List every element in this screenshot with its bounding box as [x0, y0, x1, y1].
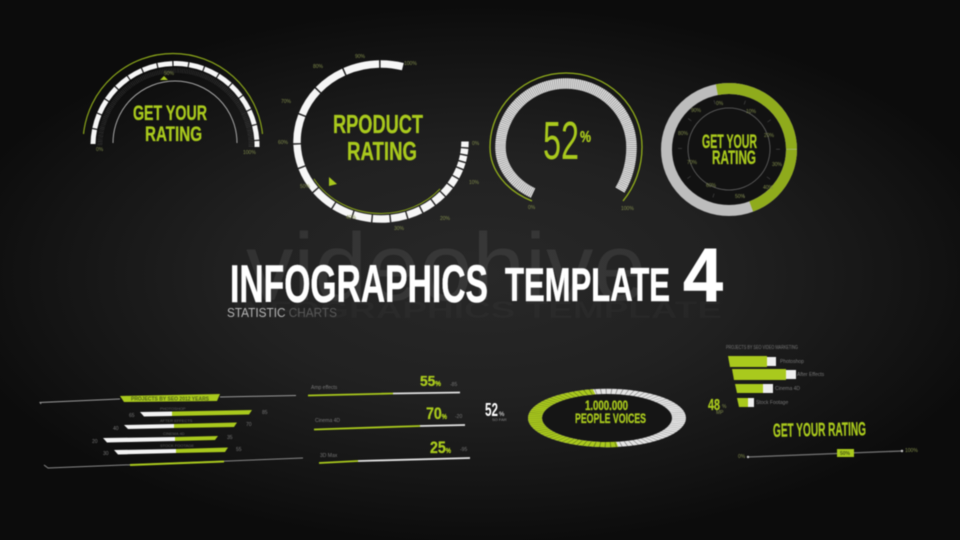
bar: photoshop: PHOTOSHOP: [160, 406, 186, 411]
bar: stock footage: 55: [236, 447, 242, 453]
scale labels: 0%: [528, 205, 536, 211]
heading: get your rating: GET YOUR RATING: [773, 419, 866, 442]
olive progress: [666, 88, 792, 210]
gauge heading: RPODUCT: [333, 109, 423, 139]
stat: 48 percent: %: [722, 404, 727, 410]
bar: after effects: After Effects: [797, 372, 825, 378]
panel: software bars: [308, 373, 470, 463]
scale labels: 0%: [472, 141, 480, 147]
bar: cinema 4d: 20: [92, 439, 98, 445]
title: 4: [683, 233, 723, 318]
bar: photoshop: [129, 406, 268, 419]
scale labels: 20%: [764, 133, 775, 139]
scale labels: 80%: [678, 131, 689, 137]
slider: 100%: [905, 448, 918, 454]
panel: projects slanted bars: [40, 394, 303, 468]
hatched band: [500, 84, 632, 193]
value: 52: [543, 111, 579, 171]
scale labels: [528, 205, 634, 212]
row: 3d max: -95: [460, 447, 467, 453]
gauge: rating dial: [666, 88, 792, 210]
gauge heading: RATING: [347, 136, 417, 166]
scale labels: 40%: [763, 185, 774, 191]
scale labels: 100%: [243, 150, 256, 156]
segmented white band: [297, 64, 465, 219]
gauge: 52 percent: [490, 73, 642, 212]
scale labels: 90%: [691, 108, 702, 114]
scale labels: 40%: [346, 215, 357, 221]
ellipse chart: people voices: [535, 391, 679, 445]
bar: stock footage: Stock Footage: [756, 400, 788, 406]
grey ring: [666, 88, 792, 210]
scale labels: 70%: [281, 99, 292, 105]
bar: stock footage: 30: [103, 451, 109, 457]
stat: 52 percent: %: [499, 412, 505, 418]
gauge heading: [333, 109, 423, 166]
bar: stock footage: STOCK FOOTAGE: [160, 443, 194, 448]
header ribbon: [120, 394, 220, 402]
bar: photoshop: 85: [262, 410, 268, 416]
watermark: INFOGRAPHICS TEMPLATE: [232, 297, 722, 324]
bar: stock footage: [103, 443, 242, 457]
gauge heading: GET YOUR: [133, 102, 207, 125]
row: 3d max: 25%: [430, 438, 452, 457]
scale labels: 60%: [706, 183, 717, 189]
gauge heading: RATING: [145, 123, 202, 146]
slider: 0%: [738, 454, 746, 460]
scale labels: 80%: [313, 64, 324, 70]
row: cinema 4d: 70%: [426, 404, 448, 423]
panel frame: [40, 396, 303, 468]
scale labels: 100%: [621, 206, 634, 212]
inner ring: [688, 108, 770, 190]
row: amp effects: 55%: [420, 373, 442, 390]
row: cinema 4d: -20: [455, 414, 462, 420]
gauge heading: GET YOUR: [702, 132, 757, 153]
row: amp effects: Amp effects: [311, 385, 338, 391]
scale labels: 50%: [300, 184, 311, 190]
scale labels: 70%: [687, 160, 698, 166]
slider: 50%: [840, 451, 851, 457]
chart heading: 1.000.000: [585, 398, 628, 413]
scale labels: [678, 101, 783, 200]
row: 3d max: [319, 438, 470, 463]
scale labels: 60%: [278, 140, 289, 146]
row: amp effects: -85: [450, 382, 457, 388]
bar: cinema 4d: [92, 431, 233, 445]
gauge: product rating: [278, 54, 480, 232]
pointer: [329, 177, 337, 186]
title: [230, 233, 723, 318]
ellipse ring: [535, 391, 679, 445]
list heading: PROJECTS BY SEO VIDEO MARKETING: [726, 345, 798, 351]
row: 3d max: 3D Max: [320, 453, 338, 459]
olive outer arc: [84, 53, 262, 134]
row: cinema 4d: Cinema 4D: [315, 418, 340, 424]
row: amp effects: [308, 373, 460, 396]
inner olive arc: [302, 70, 460, 214]
panel: horizontal bar list: [726, 345, 825, 407]
scale labels: [278, 54, 480, 232]
scale labels: 10%: [469, 180, 480, 186]
bar: after effects: [113, 418, 252, 432]
scale labels: 0%: [96, 147, 104, 153]
title: INFOGRAPHICS: [230, 255, 488, 314]
bar: after effects: AFTER EFFECTS: [160, 418, 193, 423]
scale labels: 100%: [404, 61, 417, 67]
inner thin arc: [113, 81, 237, 143]
title: TEMPLATE: [505, 258, 670, 311]
pointer: [160, 76, 168, 80]
scale labels: 50%: [735, 194, 746, 200]
scale labels: [96, 71, 256, 156]
stat: 48 percent: MP: [716, 410, 724, 416]
scale labels: 90%: [355, 54, 366, 60]
watermark: videohive: [246, 214, 646, 321]
panel: projects slanted bars: PROJECTS BY SEO 2012 YEARS: [131, 396, 210, 402]
bar: cinema 4d: CINEMA 4D: [163, 431, 185, 436]
olive outer arc: [490, 73, 642, 201]
bar: after effects: 70: [246, 422, 252, 428]
bar: cinema 4d: 35: [227, 435, 233, 441]
segmented white band: [93, 64, 257, 147]
tick ring: [100, 70, 251, 147]
bar: photoshop: Photoshop: [780, 359, 804, 365]
value: %: [580, 129, 591, 146]
scale labels: 30%: [394, 226, 405, 232]
scale labels: 50%: [164, 71, 175, 77]
gauge heading: [702, 132, 757, 169]
scale labels: 0%: [716, 101, 724, 107]
stat: 52 percent: SO FAR: [492, 417, 507, 422]
scale labels: 30%: [772, 162, 783, 168]
tick ring: [680, 100, 778, 198]
scale labels: 10%: [746, 109, 757, 115]
bar: after effects: 40: [113, 426, 119, 432]
bar: photoshop: 65: [129, 413, 135, 419]
gauge: get your rating: [84, 53, 262, 156]
slider: [738, 448, 918, 460]
gauge heading: [133, 102, 207, 146]
chart heading: PEOPLE VOICES: [575, 411, 646, 426]
stat: 48 percent: 48: [708, 397, 720, 414]
stat: 52 percent: 52: [485, 400, 498, 420]
subtitle: STATISTIC CHARTS: [227, 306, 337, 320]
bar: cinema 4d: Cinema 4D: [775, 386, 800, 392]
gauge heading: RATING: [712, 148, 756, 169]
slider handle: [837, 449, 854, 457]
row: cinema 4d: [314, 404, 465, 430]
chart heading: [575, 398, 646, 426]
scale labels: 20%: [440, 216, 451, 222]
